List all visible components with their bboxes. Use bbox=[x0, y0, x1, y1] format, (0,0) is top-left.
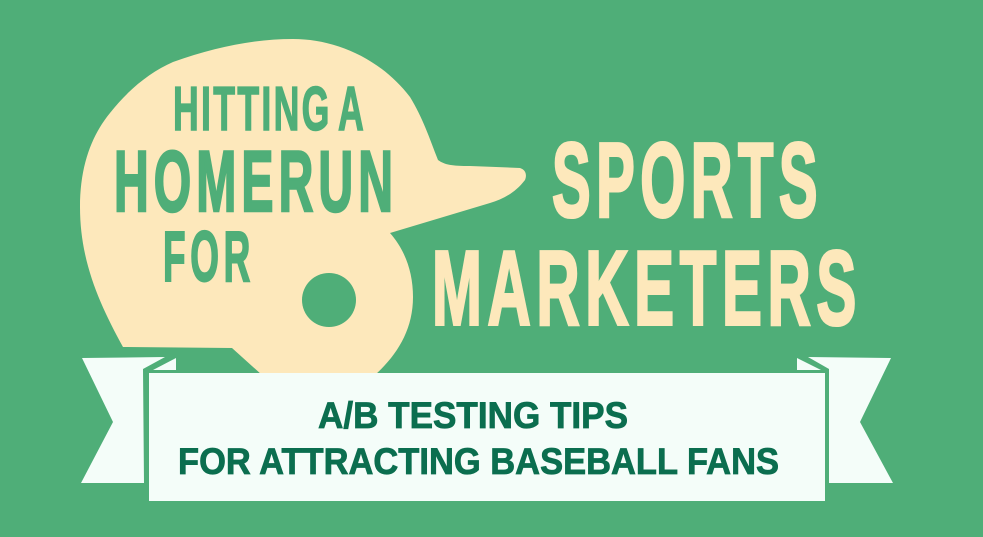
ribbon left tail bbox=[81, 357, 165, 483]
subtitle bbox=[178, 395, 779, 482]
ribbon banner bbox=[81, 357, 893, 501]
ribbon right fold bbox=[797, 358, 821, 370]
title: hitting a homerun for: FOR bbox=[163, 218, 255, 297]
ribbon main panel bbox=[149, 373, 825, 501]
ribbon right tail bbox=[808, 357, 893, 483]
title: hitting a homerun for: HITTING A bbox=[173, 75, 366, 144]
subtitle: A/B TESTING TIPS bbox=[318, 395, 628, 436]
icon: baseball helmet bbox=[80, 39, 526, 375]
subtitle: FOR ATTRACTING BASEBALL FANS bbox=[178, 441, 779, 482]
title: sports marketers bbox=[432, 122, 862, 348]
title: hitting a homerun for bbox=[114, 75, 398, 297]
ribbon left fold bbox=[153, 358, 176, 370]
title: hitting a homerun for: HOMERUN bbox=[114, 134, 398, 230]
